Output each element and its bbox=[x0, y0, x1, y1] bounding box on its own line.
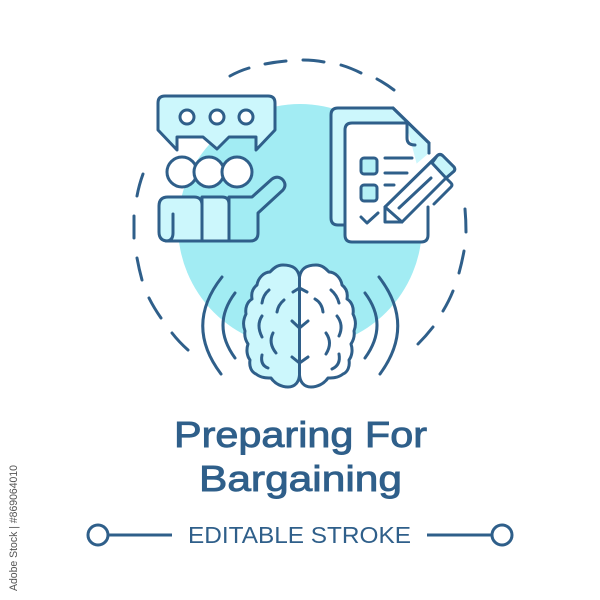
front page bbox=[345, 108, 429, 242]
midline arrows bbox=[292, 277, 308, 375]
people heads bbox=[167, 157, 252, 187]
checklist lines bbox=[361, 158, 412, 223]
people bodies bbox=[229, 177, 285, 241]
stock id text: Adobe Stock | #869064010 bbox=[8, 465, 20, 591]
checkboxes bbox=[361, 158, 377, 201]
signal arcs bbox=[203, 277, 398, 374]
brain folds bbox=[259, 290, 341, 369]
icon: team with speech bubble bbox=[158, 96, 285, 241]
background circle bbox=[178, 104, 422, 348]
editable stroke label bbox=[88, 522, 512, 548]
icon: checklist with pencil bbox=[331, 108, 455, 242]
left connector bbox=[88, 525, 172, 545]
bubble dots bbox=[180, 110, 253, 124]
right connector bbox=[427, 525, 512, 545]
title bbox=[174, 414, 427, 499]
icon: brain with signal arcs bbox=[203, 265, 398, 387]
title: Bargaining bbox=[199, 458, 402, 499]
speech bubble bbox=[158, 96, 275, 150]
back page bbox=[331, 108, 429, 225]
left hemisphere bbox=[244, 265, 300, 387]
title: Preparing For bbox=[174, 414, 427, 455]
pencil bbox=[385, 154, 455, 222]
dashed ring bbox=[134, 60, 466, 350]
editable stroke label: EDITABLE STROKE bbox=[188, 522, 411, 548]
right hemisphere bbox=[300, 265, 355, 387]
